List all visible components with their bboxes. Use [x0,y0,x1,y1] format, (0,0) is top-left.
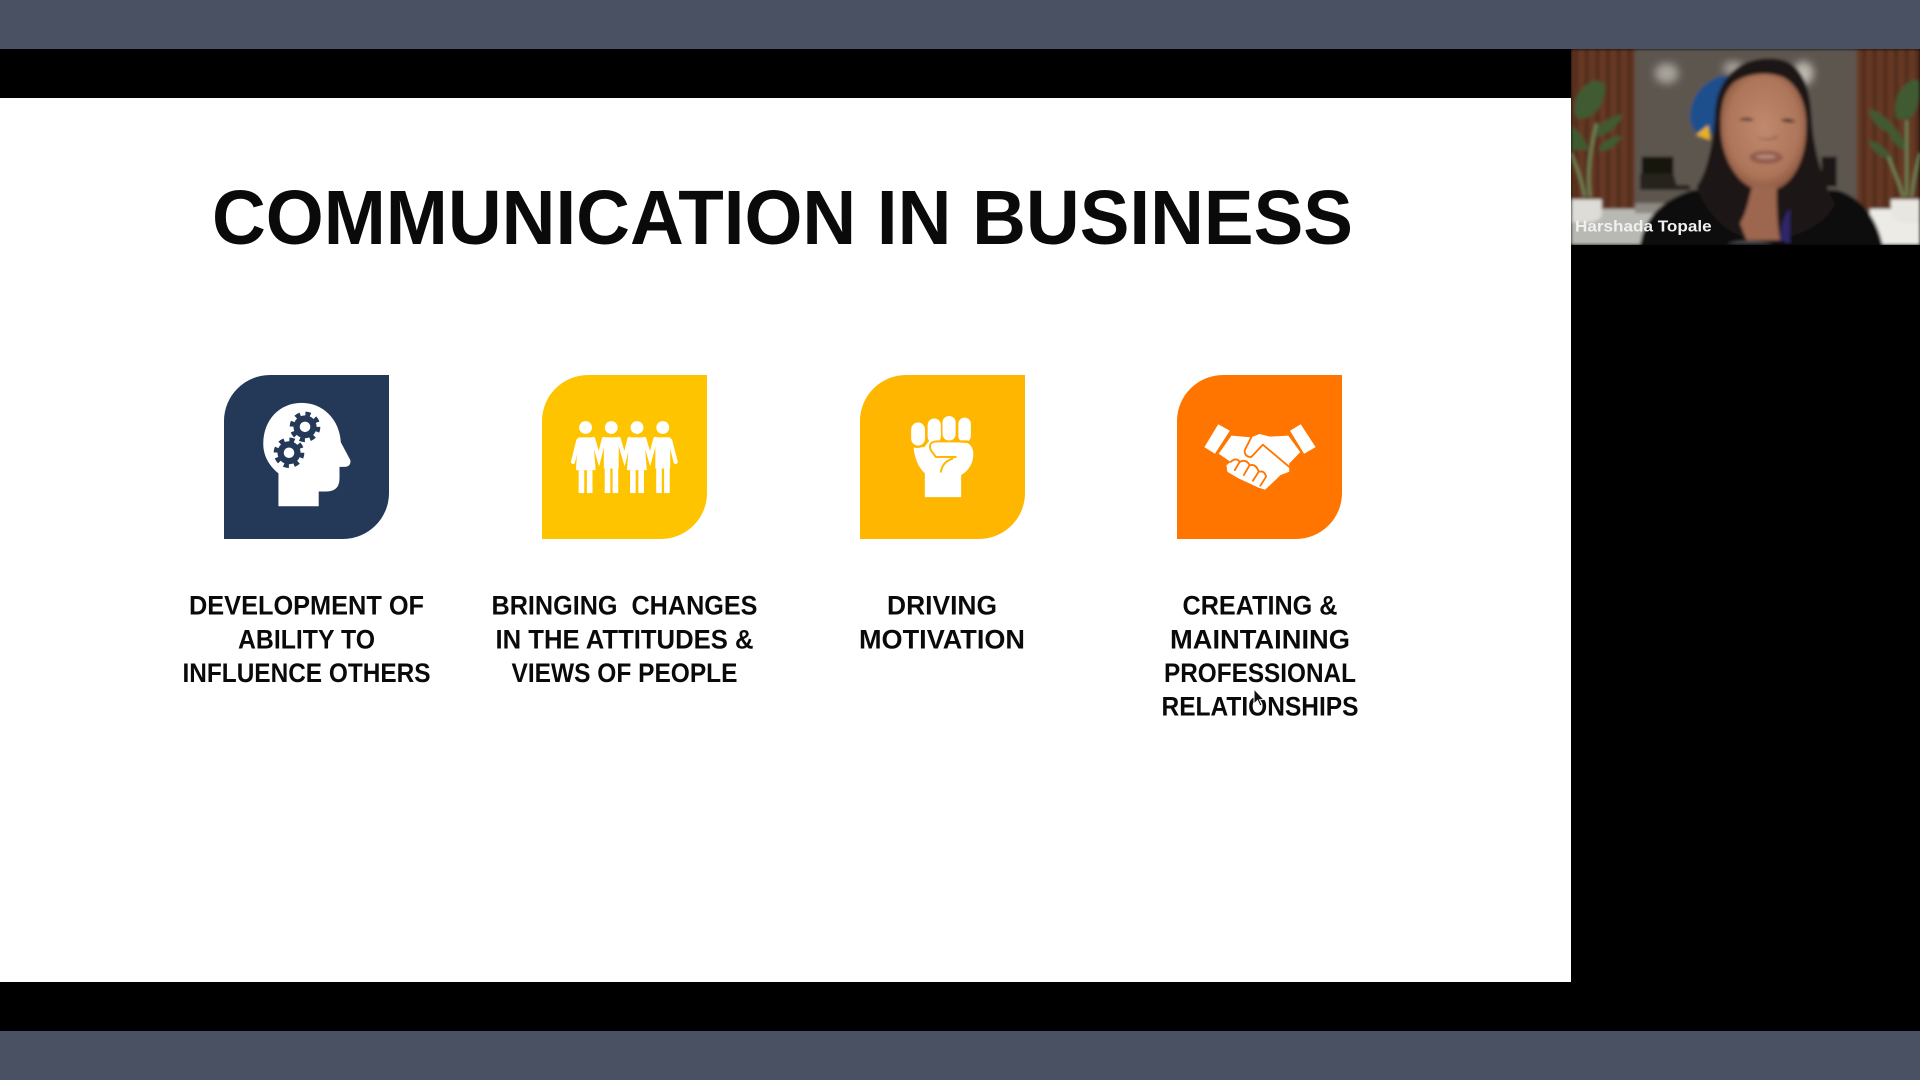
caption: development of ability: ABILITY TO [238,624,375,654]
icon: head with gears [224,375,389,539]
caption: professional relationships: PROFESSIONAL [1164,658,1356,688]
slide panel [0,98,1571,982]
caption: professional relationships: CREATING & [1182,590,1338,620]
caption: driving motivation [859,590,1025,654]
caption: driving motivation: MOTIVATION [859,624,1025,654]
caption: bringing changes: VIEWS OF PEOPLE [512,658,738,688]
video tile: presenter [1571,49,1920,245]
caption: development of ability [182,590,430,688]
icon: group of four people [542,375,707,539]
icon: handshake [1177,375,1342,539]
caption: driving motivation: DRIVING [887,590,997,620]
caption: development of ability: DEVELOPMENT OF [189,590,424,620]
caption: professional relationships: RELATIONSHIPS [1162,692,1358,722]
caption: bringing changes [492,590,758,688]
icon: raised fist [860,375,1025,539]
caption: bringing changes: IN THE ATTITUDES & [496,624,754,654]
caption: development of ability: INFLUENCE OTHERS [182,658,430,688]
caption: bringing changes: BRINGING CHANGES [492,590,758,620]
presenter name: Harshada Topale [1575,219,1712,236]
title: COMMUNICATION IN BUSINESS [212,175,1353,261]
top toolbar band [0,0,1920,49]
caption: professional relationships: MAINTAINING [1170,624,1350,654]
caption: professional relationships [1162,590,1358,722]
icon: mouse cursor [1254,689,1264,706]
bottom toolbar band [0,1031,1920,1080]
